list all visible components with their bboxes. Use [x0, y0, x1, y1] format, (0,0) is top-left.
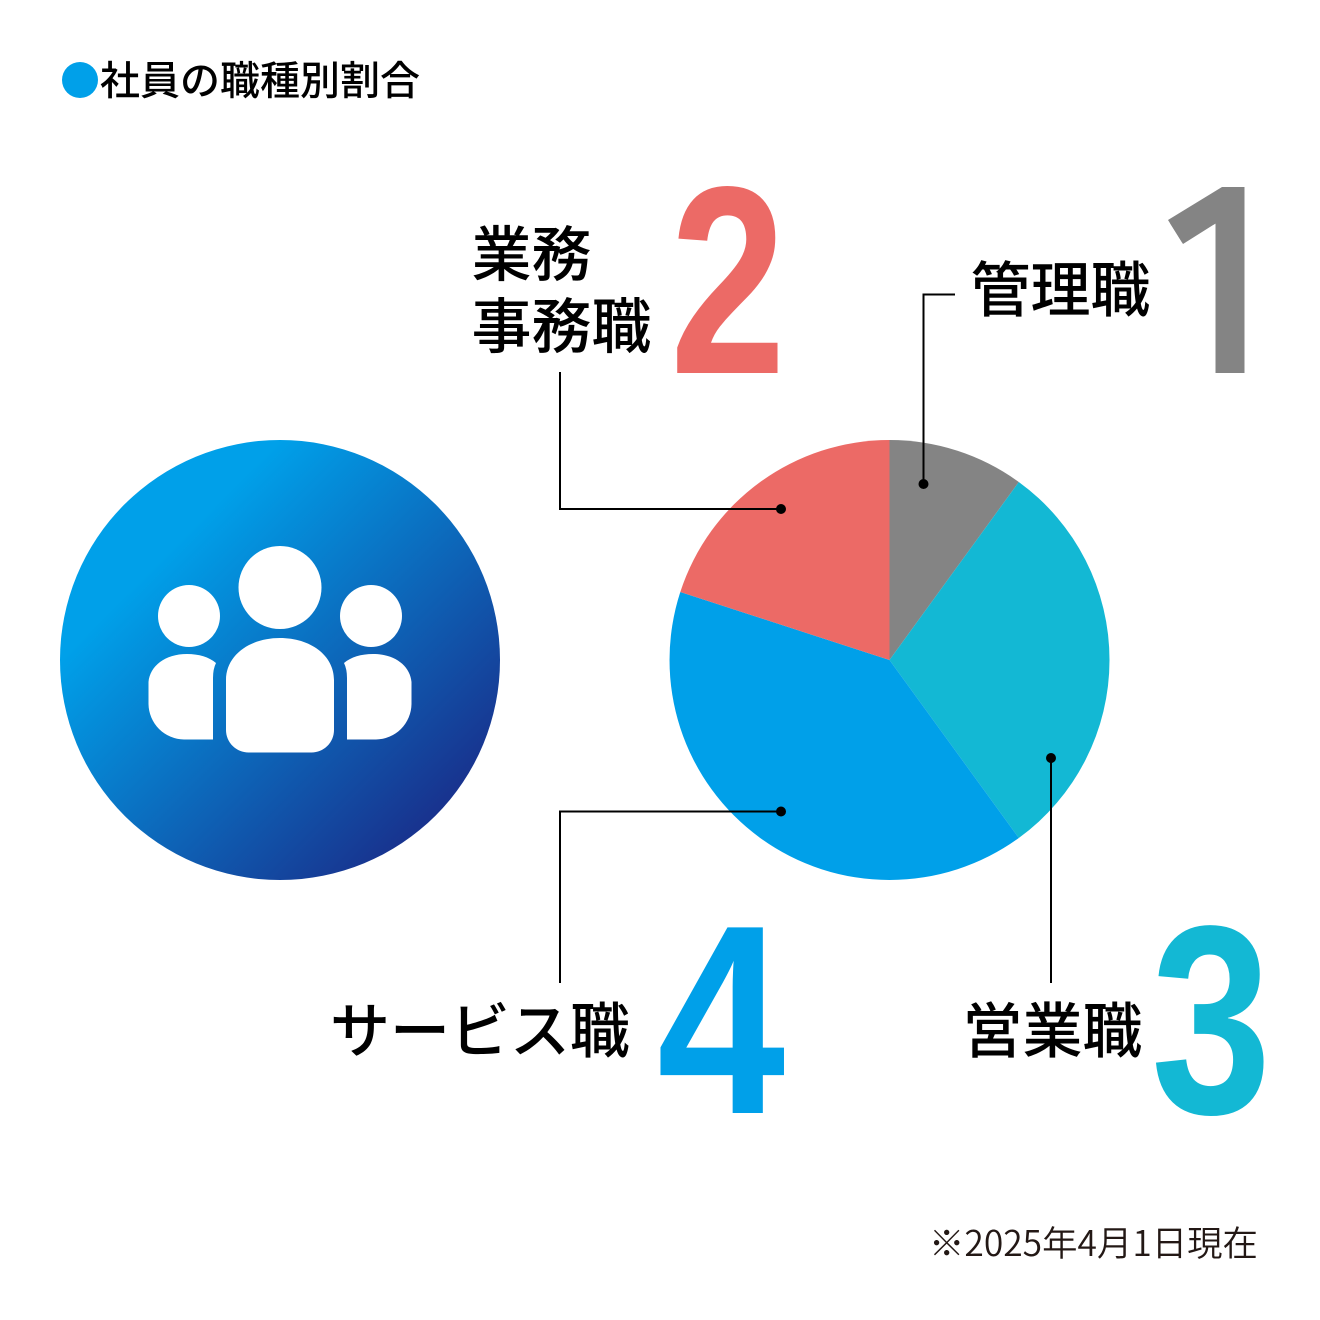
leader line: 業務事務職	[560, 372, 786, 514]
leader line: サービス職	[560, 806, 786, 983]
label: 営業職: 営業職	[962, 984, 1142, 1070]
label: 業務事務職: 業務	[472, 207, 592, 294]
label: 業務事務職: 事務職	[472, 279, 652, 366]
number: 3: 3	[1151, 869, 1271, 1170]
label: サービス職: サービス職	[330, 984, 630, 1070]
footnote: ※2025年4月1日現在	[929, 1216, 1258, 1267]
label: 管理職: 管理職	[970, 242, 1150, 330]
icon: people group in gradient circle	[60, 440, 500, 880]
leader line: 営業職	[1046, 753, 1056, 983]
number: 2: 2	[670, 131, 786, 430]
pie chart	[670, 440, 1110, 880]
number: 4: 4	[657, 870, 785, 1171]
leader line: 管理職	[918, 294, 955, 489]
number: 1: 1	[1152, 136, 1298, 429]
title: 社員の職種別割合	[100, 48, 420, 106]
